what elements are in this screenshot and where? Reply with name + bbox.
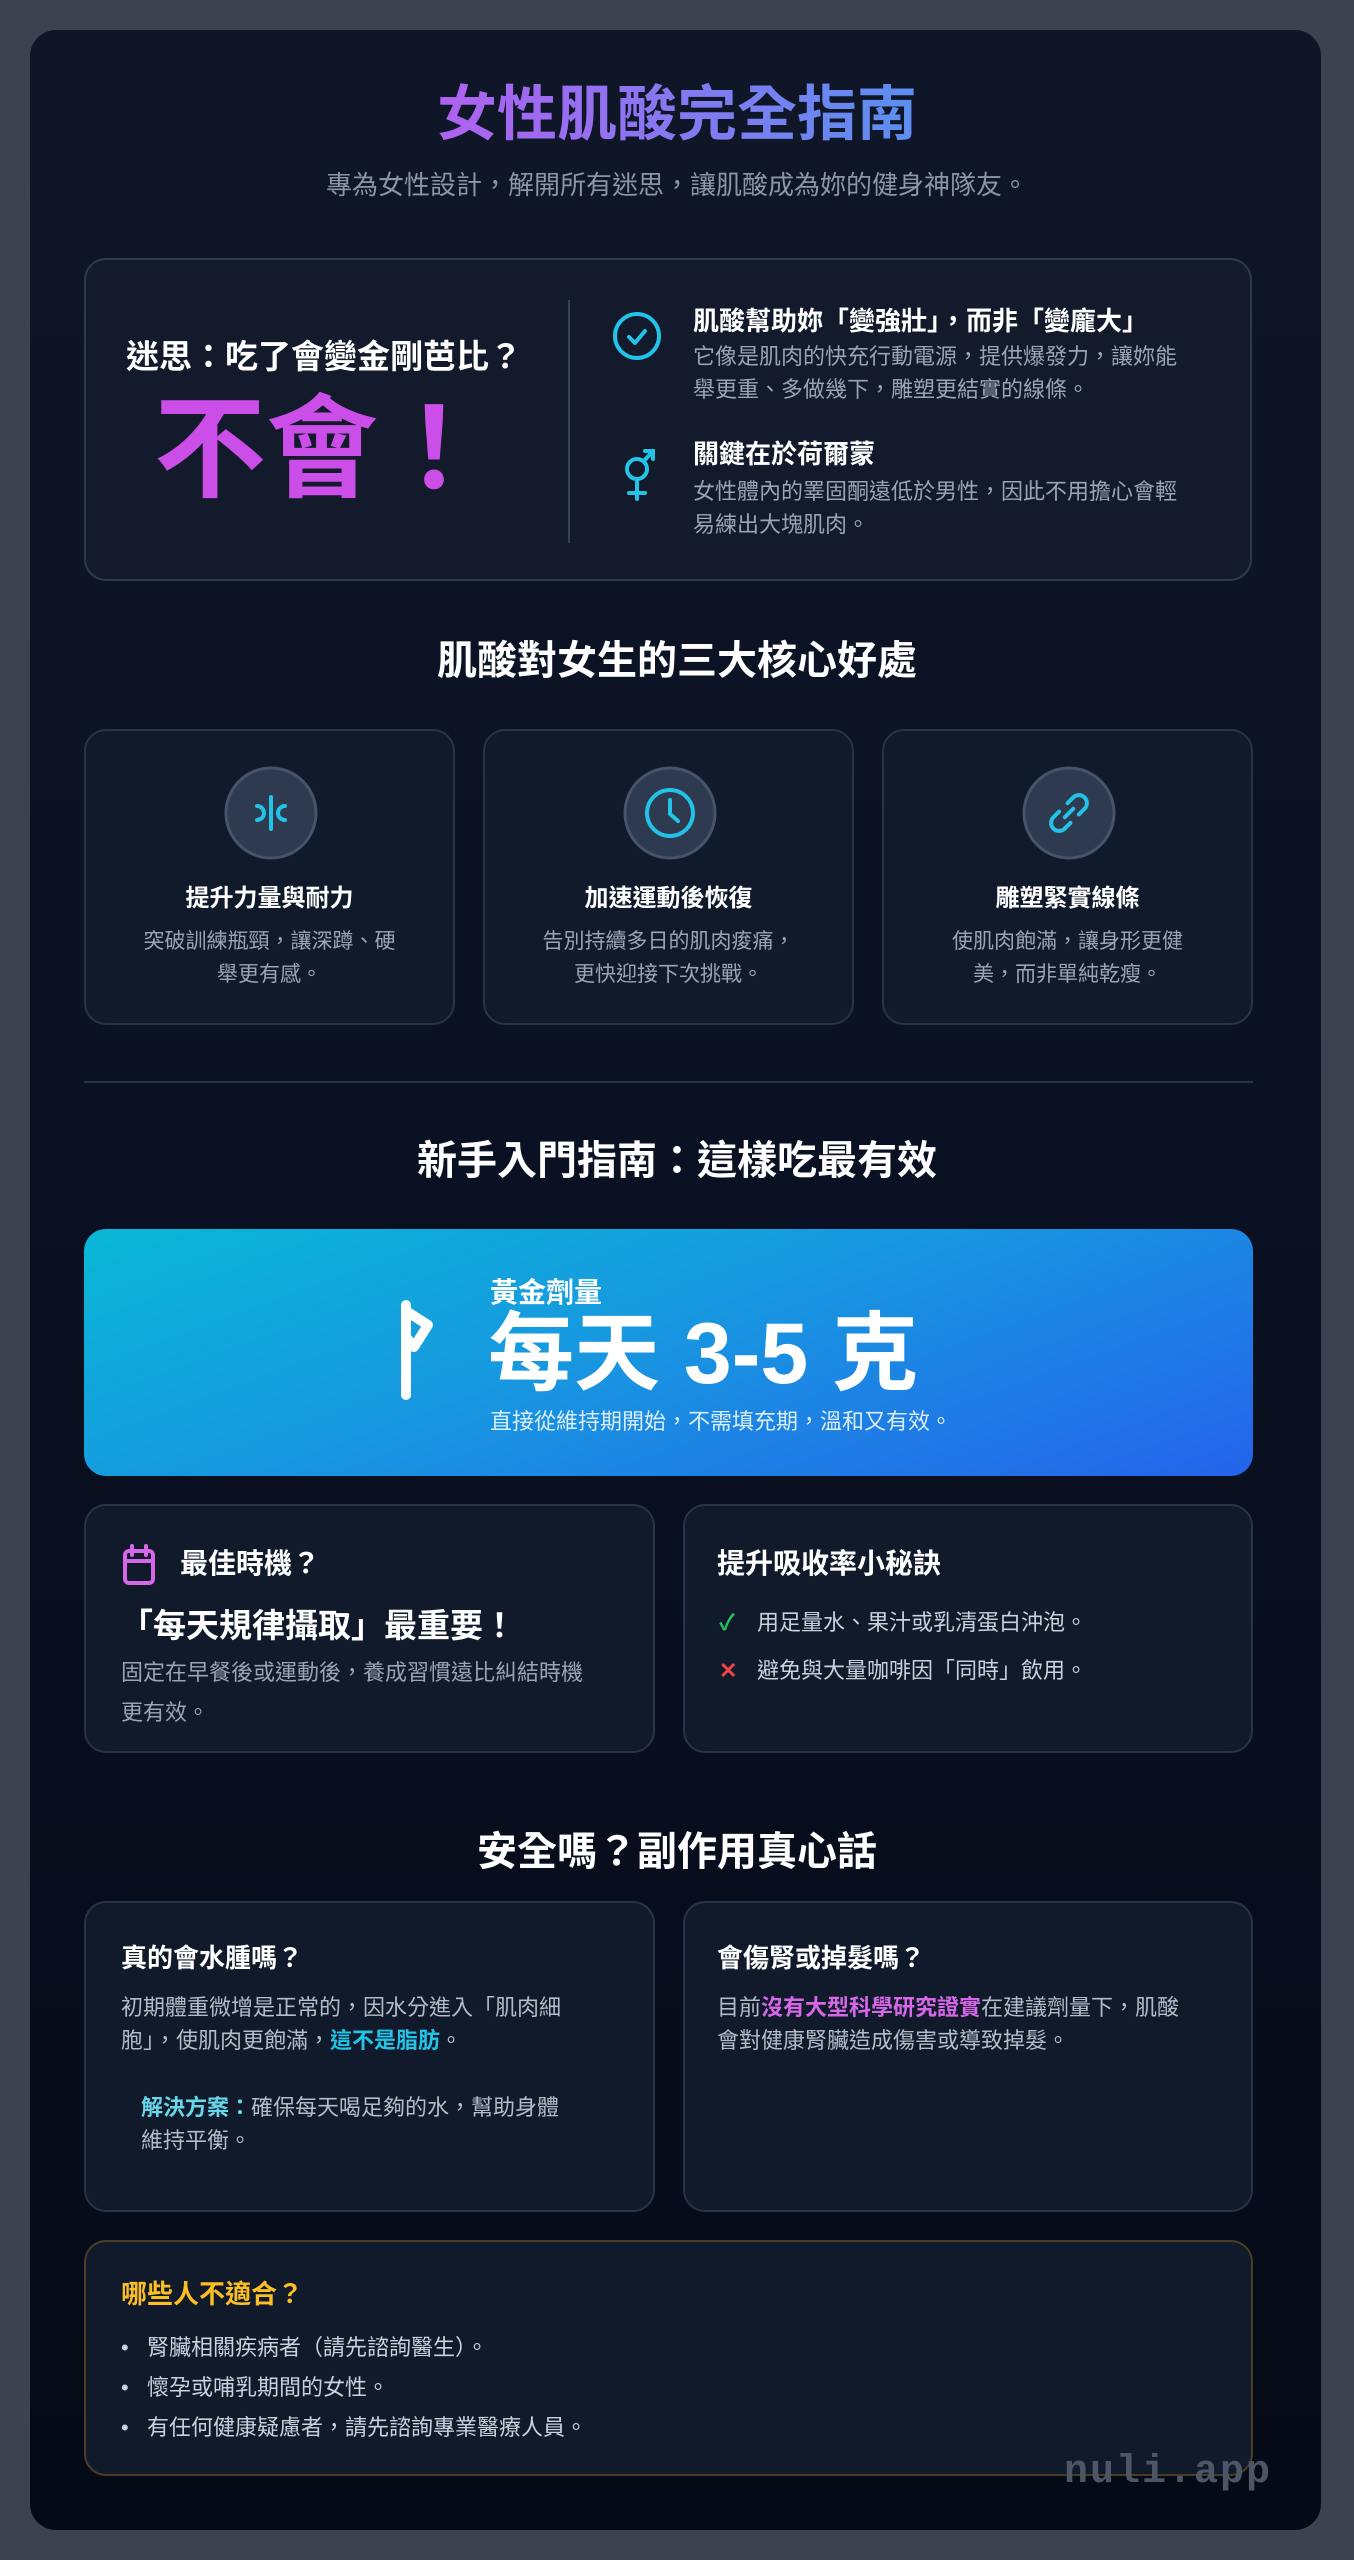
panel: benefit toning [882, 729, 1253, 1025]
list: • 有任何健康疑慮者，請先諮詢專業醫療人員。 [121, 2415, 587, 2440]
icon: link [1022, 766, 1116, 860]
panel: myth [84, 258, 1252, 581]
answer: no: 不會！ [154, 387, 490, 512]
panel: water retention: 初期體重微增是正常的，因水分進入「肌肉細胞」，使肌肉更飽滿，這不是脂肪。 [121, 1995, 561, 2053]
panel: kidney hair: 會傷腎或掉髮嗎？ [717, 1943, 925, 1973]
tip: check: 用足量水、果汁或乳清蛋白沖泡。 [757, 1610, 1087, 1635]
point 1: 它像是肌肉的快充行動電源，提供爆發力，讓妳能舉更重、多做幾下，雕塑更結實的線條。 [693, 344, 1177, 402]
myth question: 迷思：吃了會變金剛芭比？ [126, 338, 522, 375]
panel: benefit toning: 雕塑緊實線條 [996, 885, 1140, 912]
panel: kidney hair [683, 1901, 1253, 2212]
panel: benefit recovery: 加速運動後恢復 [584, 885, 752, 912]
tip: check: ✓ [719, 1610, 735, 1635]
icon: calendar [123, 1544, 155, 1585]
tip: cross: ✕ [719, 1658, 737, 1683]
panel: best timing [84, 1504, 655, 1753]
panel: benefit strength [84, 729, 455, 1025]
panel: not suitable: 哪些人不適合？ [121, 2279, 303, 2309]
point 2: 關鍵在於荷爾蒙 [693, 439, 875, 469]
subtitle: 專為女性設計，解開所有迷思，讓肌酸成為妳的健身神隊友。 [326, 170, 1028, 200]
panel: best timing: 「每天規律攝取」最重要！ [120, 1607, 516, 1644]
divider [568, 300, 570, 543]
panel: benefit strength: 突破訓練瓶頸，讓深蹲、硬舉更有感。 [144, 930, 396, 986]
title: 女性肌酸完全指南 [437, 81, 917, 148]
panel: absorption tips [683, 1504, 1253, 1753]
list: • 腎臟相關疾病者（請先諮詢醫生）。 [121, 2335, 488, 2360]
list [121, 2335, 587, 2440]
panel: not suitable [84, 2240, 1253, 2476]
panel: golden dose banner [84, 1229, 1253, 1476]
icon: clock [624, 766, 716, 860]
panel: golden dose banner: 黃金劑量 [490, 1277, 602, 1308]
panel: water retention [84, 1901, 655, 2212]
icon: gender symbol [625, 449, 655, 501]
icon: strength [224, 766, 318, 860]
heading: safety: 安全嗎？副作用真心話 [477, 1830, 877, 1874]
watermark: nuli.app [1064, 2450, 1272, 2495]
panel: benefit toning: 使肌肉飽滿，讓身形更健美，而非單純乾瘦。 [952, 930, 1183, 986]
panel: kidney hair: 目前沒有大型科學研究證實在建議劑量下，肌酸會對健康腎臟造成傷害或導致掉髮。 [717, 1995, 1179, 2053]
tip: cross: 避免與大量咖啡因「同時」飲用。 [757, 1658, 1087, 1683]
point 2 [625, 439, 1177, 537]
panel: best timing: 最佳時機？ [180, 1548, 320, 1579]
panel: water retention: 真的會水腫嗎？ [121, 1943, 303, 1973]
panel: benefit recovery: 告別持續多日的肌肉痠痛，更快迎接下次挑戰。 [542, 930, 794, 986]
panel: best timing: 固定在早餐後或運動後，養成習慣遠比糾結時機更有效。 [121, 1660, 583, 1725]
panel: absorption tips: 提升吸收率小秘訣 [717, 1548, 941, 1579]
heading: guide: 新手入門指南：這樣吃最有效 [417, 1139, 937, 1183]
panel: benefit strength: 提升力量與耐力 [186, 885, 354, 912]
icon: check circle [613, 312, 661, 360]
icon: pose [401, 1300, 433, 1400]
heading: benefits: 肌酸對女生的三大核心好處 [437, 639, 917, 683]
panel: golden dose banner: 直接從維持期開始，不需填充期，溫和又有效。 [490, 1409, 952, 1434]
point 1: 肌酸幫助妳「變強壯」，而非「變龐大」 [693, 306, 1148, 336]
panel: golden dose banner: 每天 3-5 克 [488, 1306, 918, 1402]
point 2: 女性體內的睪固酮遠低於男性，因此不用擔心會輕易練出大塊肌肉。 [693, 479, 1177, 537]
panel: benefit recovery [483, 729, 854, 1025]
point 1 [613, 306, 1177, 402]
list: • 懷孕或哺乳期間的女性。 [121, 2375, 389, 2400]
solution: 解決方案：確保每天喝足夠的水，幫助身體維持平衡。 [141, 2095, 559, 2153]
